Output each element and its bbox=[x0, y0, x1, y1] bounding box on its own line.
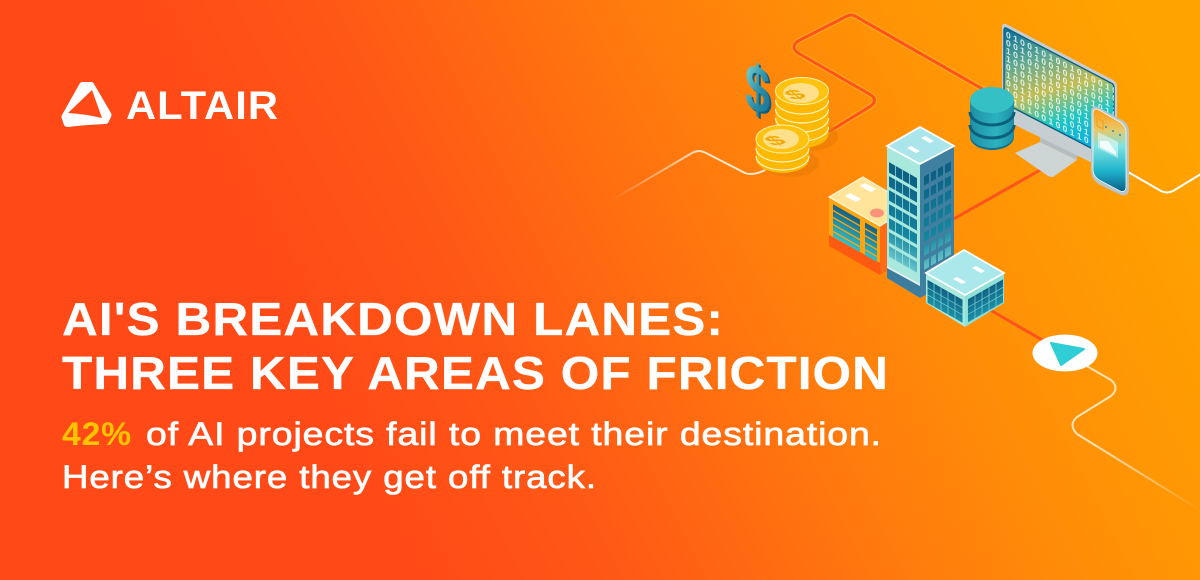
icon: dollar sign: $ bbox=[747, 51, 772, 132]
orange building walls bbox=[829, 197, 880, 263]
white route: phone to right edge bbox=[1128, 172, 1200, 192]
route lines bbox=[612, 15, 1200, 510]
tower rooftop units bbox=[907, 136, 934, 153]
low building walls bbox=[926, 273, 965, 327]
orange building windows bbox=[833, 204, 877, 262]
binary digits: 0 0 1 0 1 0 0 1 0 0 1 0 1 0 1 0 bbox=[1006, 37, 1117, 105]
low building roof bbox=[926, 250, 1004, 295]
marker triangle bbox=[1051, 343, 1084, 365]
subheading line 1: of AI projects fail to meet their destination. bbox=[146, 416, 882, 452]
icon: dollar sign: $ bbox=[745, 49, 770, 130]
monitor screen bbox=[1004, 28, 1114, 160]
logo wordmark: ALTAIR bbox=[126, 84, 279, 128]
binary digits: 1 0 1 0 0 1 0 1 1 0 0 1 0 1 0 0 bbox=[1006, 85, 1117, 153]
white route: marker to bottom right bbox=[1072, 365, 1200, 510]
tower left windows bbox=[889, 162, 917, 273]
stat 42%: 42% bbox=[62, 416, 132, 452]
icon: monitor bbox=[1002, 24, 1117, 177]
headline bbox=[62, 293, 889, 399]
binary digits: 1 0 0 1 1 0 1 0 1 0 0 0 1 0 1 0 bbox=[1006, 53, 1117, 121]
binary digits: 0 1 0 0 1 0 0 1 0 1 0 1 0 0 1 0 bbox=[1006, 61, 1117, 129]
binary digits: 0 1 0 0 1 0 1 0 0 1 0 1 0 0 1 0 bbox=[1006, 29, 1117, 97]
red route: coins to database bbox=[794, 15, 1000, 131]
red route: monitor to tower bbox=[950, 169, 1042, 221]
tower walls bbox=[887, 146, 920, 298]
icon: coin stacks bbox=[756, 78, 838, 177]
binary digits: 1 0 0 1 0 0 1 0 1 0 0 1 0 1 0 1 bbox=[1006, 69, 1117, 137]
low building left windows bbox=[928, 280, 962, 323]
phone chart card bbox=[1098, 132, 1118, 158]
headline line 2: THREE KEY AREAS OF FRICTION bbox=[62, 347, 889, 399]
icon: phone bbox=[1091, 107, 1129, 195]
tower base bbox=[887, 267, 920, 298]
logo: Altair bbox=[62, 82, 279, 128]
binary digits: 1 0 1 0 0 1 0 0 0 1 0 1 0 0 1 1 bbox=[1006, 45, 1117, 113]
binary digits: 0 1 0 1 0 0 1 0 0 1 1 0 1 0 0 1 bbox=[1006, 93, 1117, 161]
tower roof bbox=[887, 127, 954, 164]
red route: building to marker bbox=[992, 311, 1044, 341]
icon: database cylinder bbox=[970, 87, 1014, 150]
rooftop units bbox=[845, 183, 884, 218]
marker: play icon bbox=[1032, 334, 1098, 372]
back coin stack: $ bbox=[780, 87, 812, 103]
low building right windows bbox=[968, 279, 1003, 322]
binary digits: 0 0 1 1 0 1 0 0 1 0 1 0 0 1 0 0 bbox=[1006, 77, 1117, 145]
white route: left fade to coins bbox=[612, 151, 765, 200]
icon: tower bbox=[887, 127, 954, 298]
orange building roof bbox=[829, 177, 888, 226]
monitor frame bbox=[1002, 24, 1117, 175]
binary digits bbox=[1006, 32, 1114, 144]
tower right windows bbox=[924, 161, 951, 270]
monitor stand bbox=[1015, 142, 1077, 177]
front coin stack: $ bbox=[760, 133, 792, 149]
headline line 1: AI'S BREAKDOWN LANES: bbox=[62, 293, 724, 345]
icon: orange building bbox=[829, 177, 888, 275]
subheading bbox=[62, 416, 882, 495]
marker ellipse bbox=[1032, 334, 1098, 372]
subheading line 2: Here’s where they get off track. bbox=[62, 459, 597, 495]
icon: low building bbox=[926, 250, 1004, 327]
low building rooftop units bbox=[953, 266, 985, 284]
logo mark bbox=[62, 82, 112, 127]
